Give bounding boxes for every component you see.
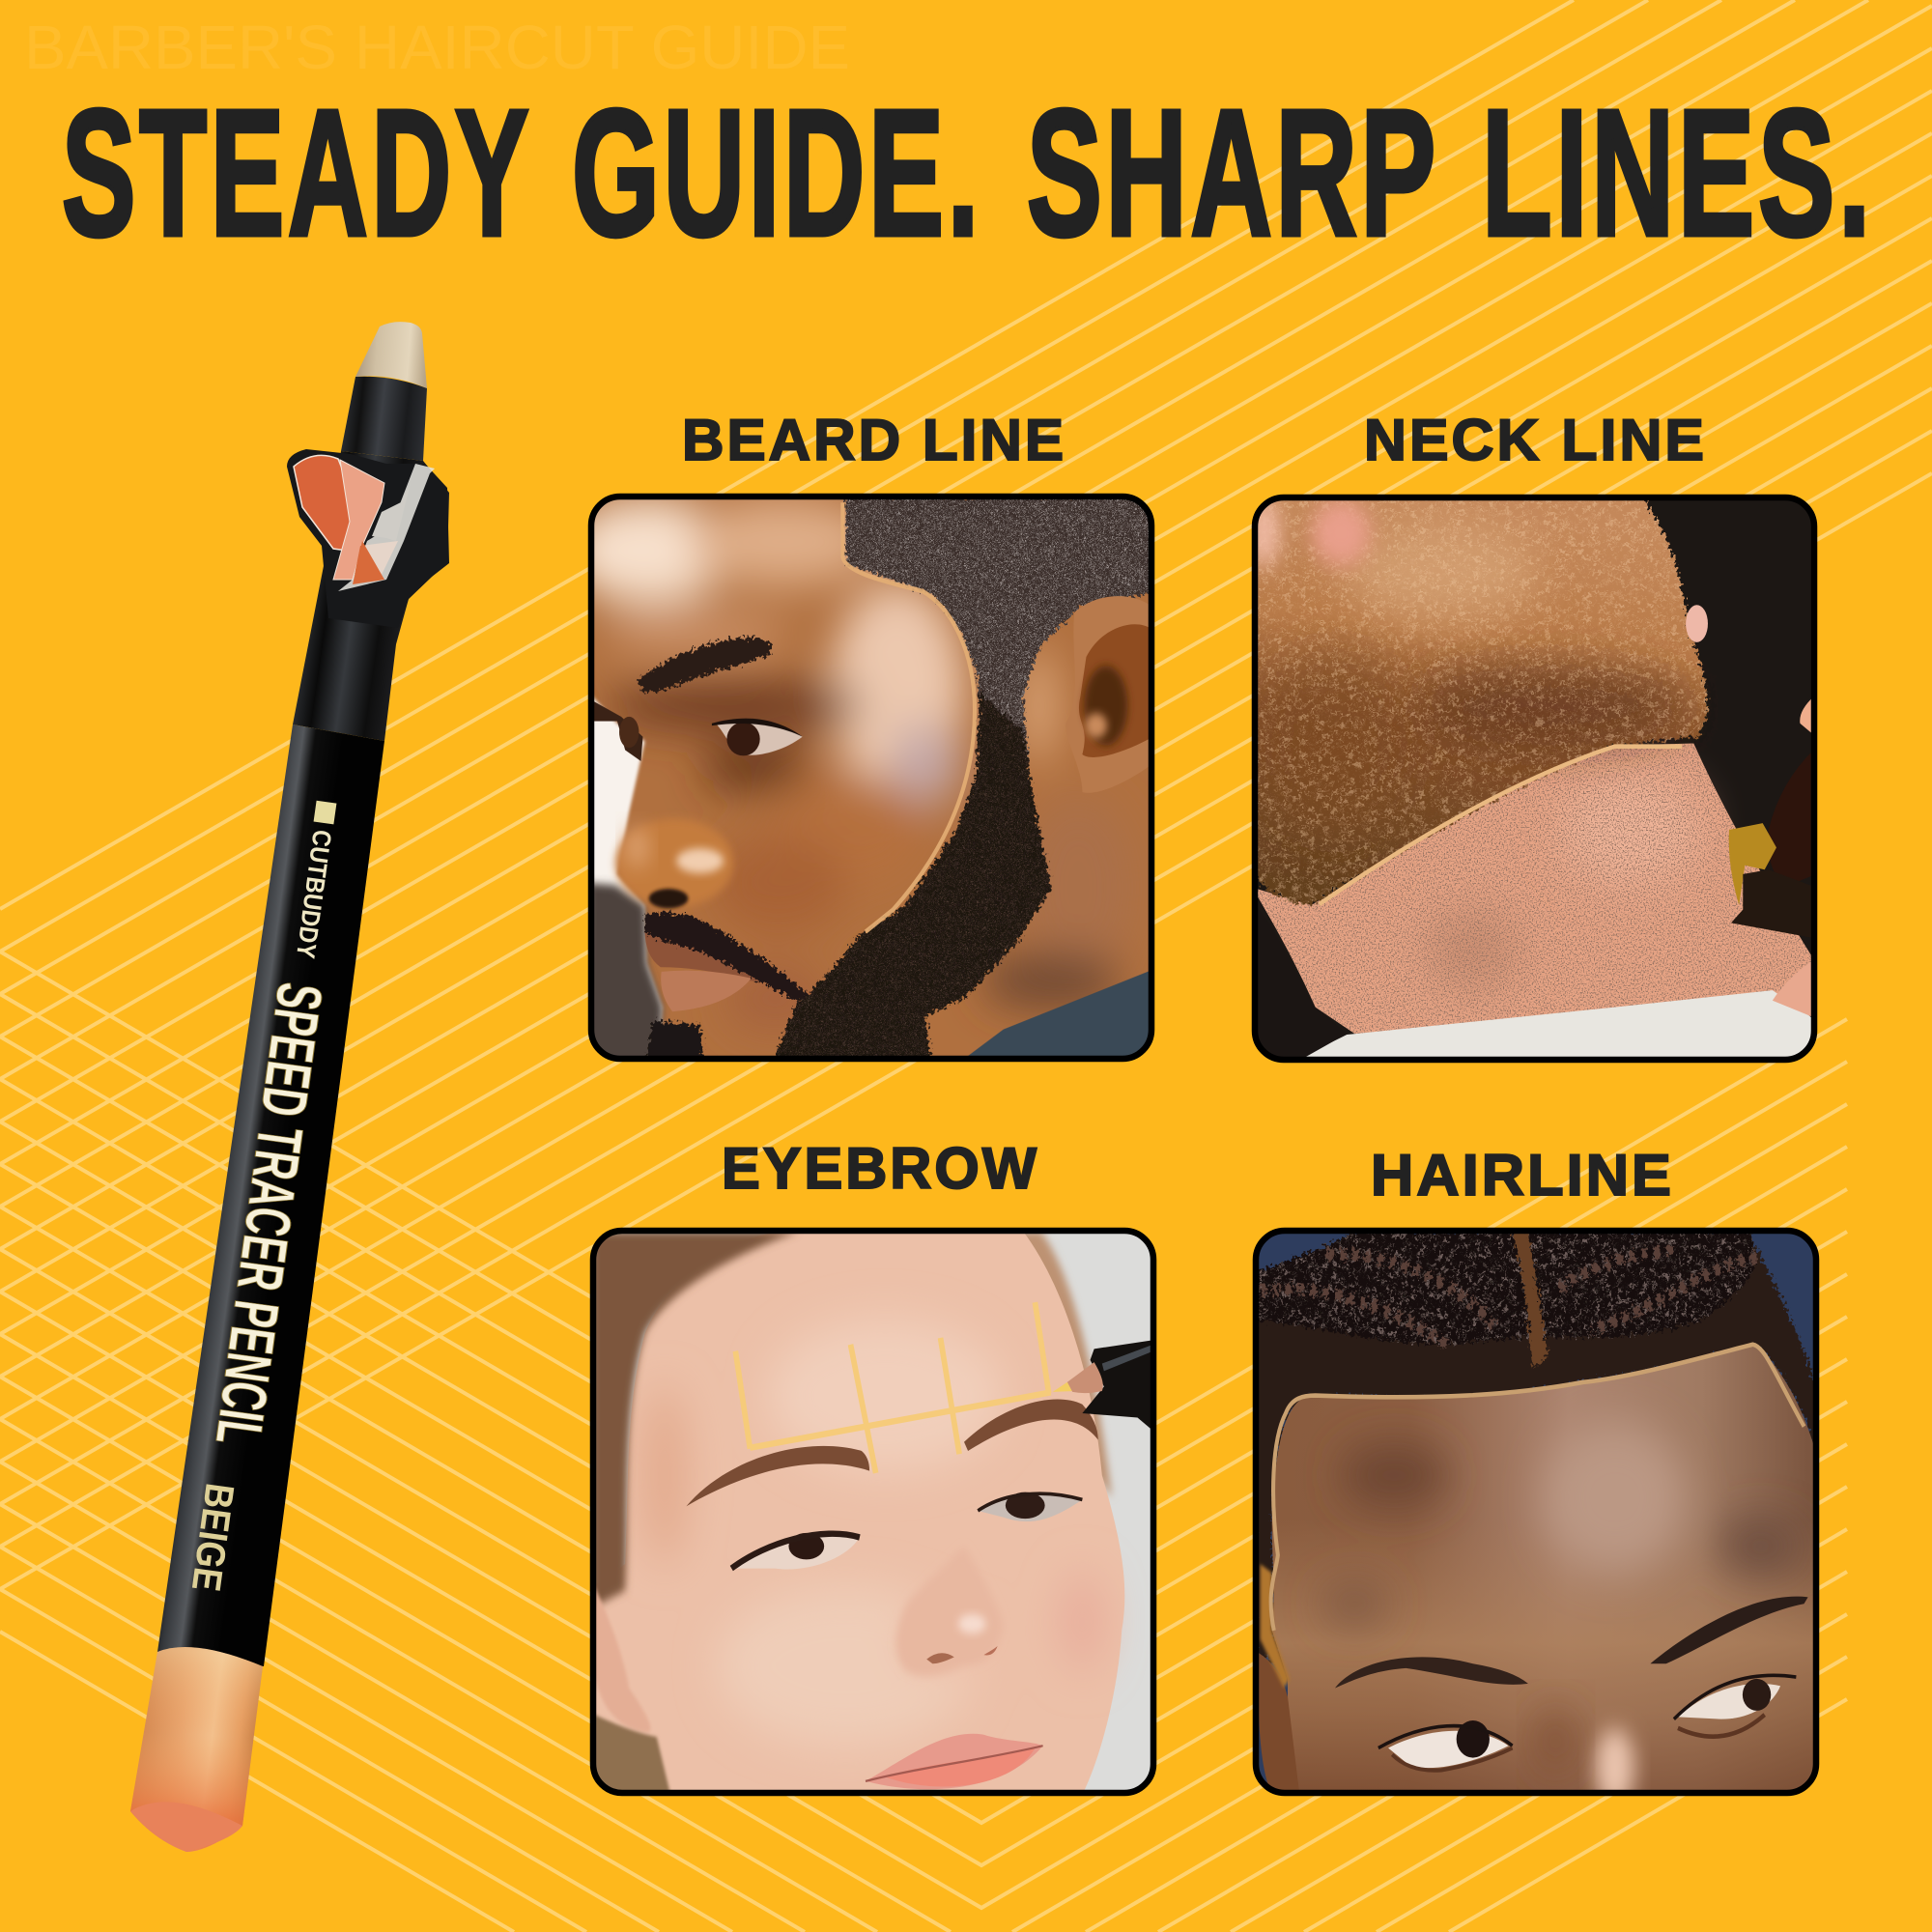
hair — [1254, 1232, 1820, 1670]
title — [62, 73, 1874, 273]
hand — [1773, 699, 1811, 1016]
beard — [645, 693, 1052, 1065]
pencil ferrule — [130, 1647, 263, 1852]
ear and lower hair — [594, 1586, 670, 1795]
right eye — [1674, 1675, 1796, 1737]
panel: beard line photo — [566, 493, 1157, 1065]
pencil brand text: CUTBUDDY — [291, 828, 337, 960]
neck skin — [1252, 743, 1816, 1034]
clip black blob — [287, 449, 449, 628]
left eye — [731, 1533, 860, 1569]
pencil cap — [341, 377, 427, 461]
panel: hairline photo — [1252, 1227, 1824, 1807]
pencil tip — [355, 322, 427, 388]
background beside face — [594, 696, 665, 1025]
guide lines — [735, 1302, 1051, 1473]
pencil product — [130, 322, 449, 1852]
face — [593, 1232, 1124, 1795]
pencil collar — [293, 451, 449, 741]
face — [1272, 1345, 1820, 1807]
heading: eyebrow: EYEBROW — [722, 1136, 1039, 1201]
beard — [1252, 497, 1707, 905]
faint watermark heading: BARBER'S HAIRCUT GUIDE — [24, 13, 850, 82]
clipper — [1729, 748, 1816, 938]
hair right — [1025, 1234, 1116, 1498]
ear — [1258, 1653, 1299, 1795]
ear tip — [1686, 605, 1708, 642]
right eyebrow — [964, 1400, 1098, 1451]
guide line — [842, 502, 975, 932]
pink skin patch — [1248, 497, 1371, 568]
collar — [1292, 990, 1816, 1058]
eyebrow — [637, 638, 772, 693]
eye — [712, 719, 803, 755]
guide line — [1320, 747, 1682, 904]
right eyebrow — [1650, 1597, 1808, 1663]
clip peach tab — [294, 455, 435, 591]
guide line — [1271, 1345, 1804, 1631]
pencil barrel — [157, 724, 384, 1666]
nose — [615, 819, 733, 908]
left eyebrow — [686, 1446, 869, 1506]
heading: hairline: HAIRLINE — [1371, 1143, 1674, 1208]
title: STEADY — [62, 73, 532, 273]
ear — [1074, 596, 1149, 792]
shirt — [968, 972, 1149, 1056]
title: SHARP — [1027, 73, 1439, 273]
side fade — [1260, 1564, 1290, 1689]
panel: eyebrow photo — [587, 1227, 1159, 1799]
pencil end cap — [130, 1802, 242, 1852]
mouth — [645, 912, 822, 1011]
lower dark — [1252, 900, 1347, 1065]
pencil in photo — [1053, 1340, 1153, 1431]
hair — [846, 497, 1153, 763]
left eye — [1378, 1720, 1513, 1771]
right eye — [978, 1492, 1082, 1521]
panel: neck line photo — [1248, 493, 1820, 1065]
left eyebrow — [1335, 1657, 1528, 1689]
lips — [866, 1734, 1043, 1789]
pencil colour text: BEIGE — [184, 1481, 243, 1594]
title: GUIDE. — [572, 73, 982, 273]
pencil logo mark — [314, 801, 336, 824]
far eye — [593, 701, 642, 761]
nose — [896, 1547, 1004, 1676]
heading: neck line: NECK LINE — [1364, 408, 1707, 472]
pencil name text: SPEED TRACER PENCIL — [203, 979, 336, 1450]
heading: beard line: BEARD LINE — [682, 408, 1066, 472]
hair left — [591, 1232, 799, 1608]
